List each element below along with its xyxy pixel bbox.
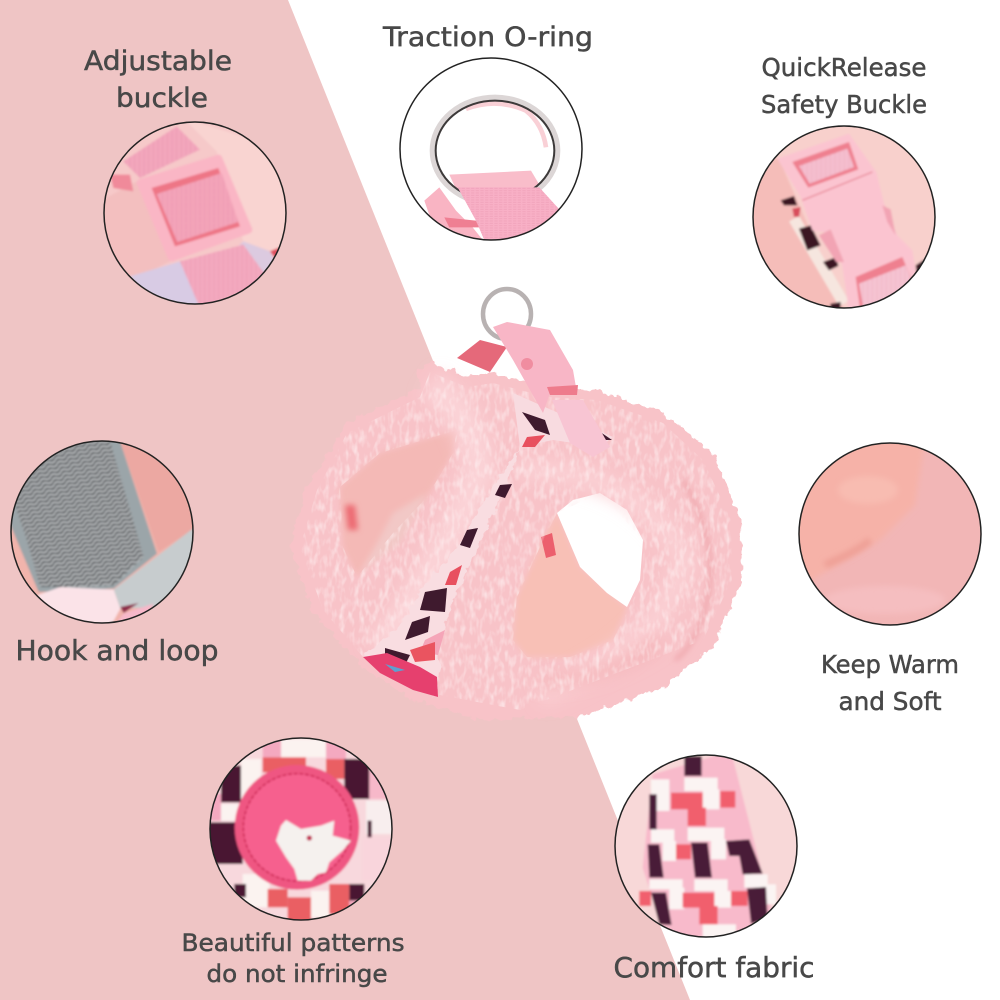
plastic buckle [493,322,578,413]
heading: Adjustable buckle: Adjustable [84,46,232,77]
heading: Beautiful patterns do not infringe: do not infringe [206,960,388,988]
heading: Adjustable buckle: buckle [116,83,208,114]
pink badge edge [363,653,438,697]
fur highlights and shading [380,385,710,695]
red pattern in left hole [345,505,358,530]
heading: Beautiful patterns do not infringe [182,929,404,988]
heading: Traction O-ring: Traction O-ring [382,22,593,53]
fur texture [300,372,732,710]
pink diagonal background [0,0,690,1000]
icon: O-ring photo [400,58,582,244]
right hole lining [513,513,627,657]
icon: adjustable buckle photo [100,118,290,308]
heading: Keep Warm and Soft: Keep Warm [821,650,959,679]
fur silhouette [290,362,742,720]
left hole lining [340,430,457,577]
heading: Keep Warm and Soft: and Soft [838,687,942,716]
icon: dog badge photo [206,734,396,924]
metal O-ring [483,289,531,339]
heading: Hook and loop: Hook and loop [16,634,218,667]
heading: QuickRelease Safety Buckle: Safety Buckle [761,90,927,119]
heading: QuickRelease Safety Buckle [761,53,927,119]
icon: quick release buckle photo [749,122,939,312]
patterned fabric strip [363,447,520,697]
heading: Keep Warm and Soft [821,650,959,716]
heading: Adjustable buckle [84,46,232,114]
red pattern in right hole [541,533,556,558]
heading: Comfort fabric: Comfort fabric [614,951,814,984]
left hole background [360,493,427,573]
front strap [552,400,610,457]
heading: QuickRelease Safety Buckle: QuickRelease [762,53,926,82]
top pattern under buckle [513,393,613,447]
icon: hook and loop photo [7,437,197,627]
right hole see-through [557,493,643,607]
main harness product photo [290,289,742,720]
red back strap [457,340,507,372]
heading: Beautiful patterns do not infringe: Beautiful patterns [182,929,404,957]
icon: comfort fabric pattern photo [611,751,801,941]
icon: warm soft fur photo [795,439,985,629]
